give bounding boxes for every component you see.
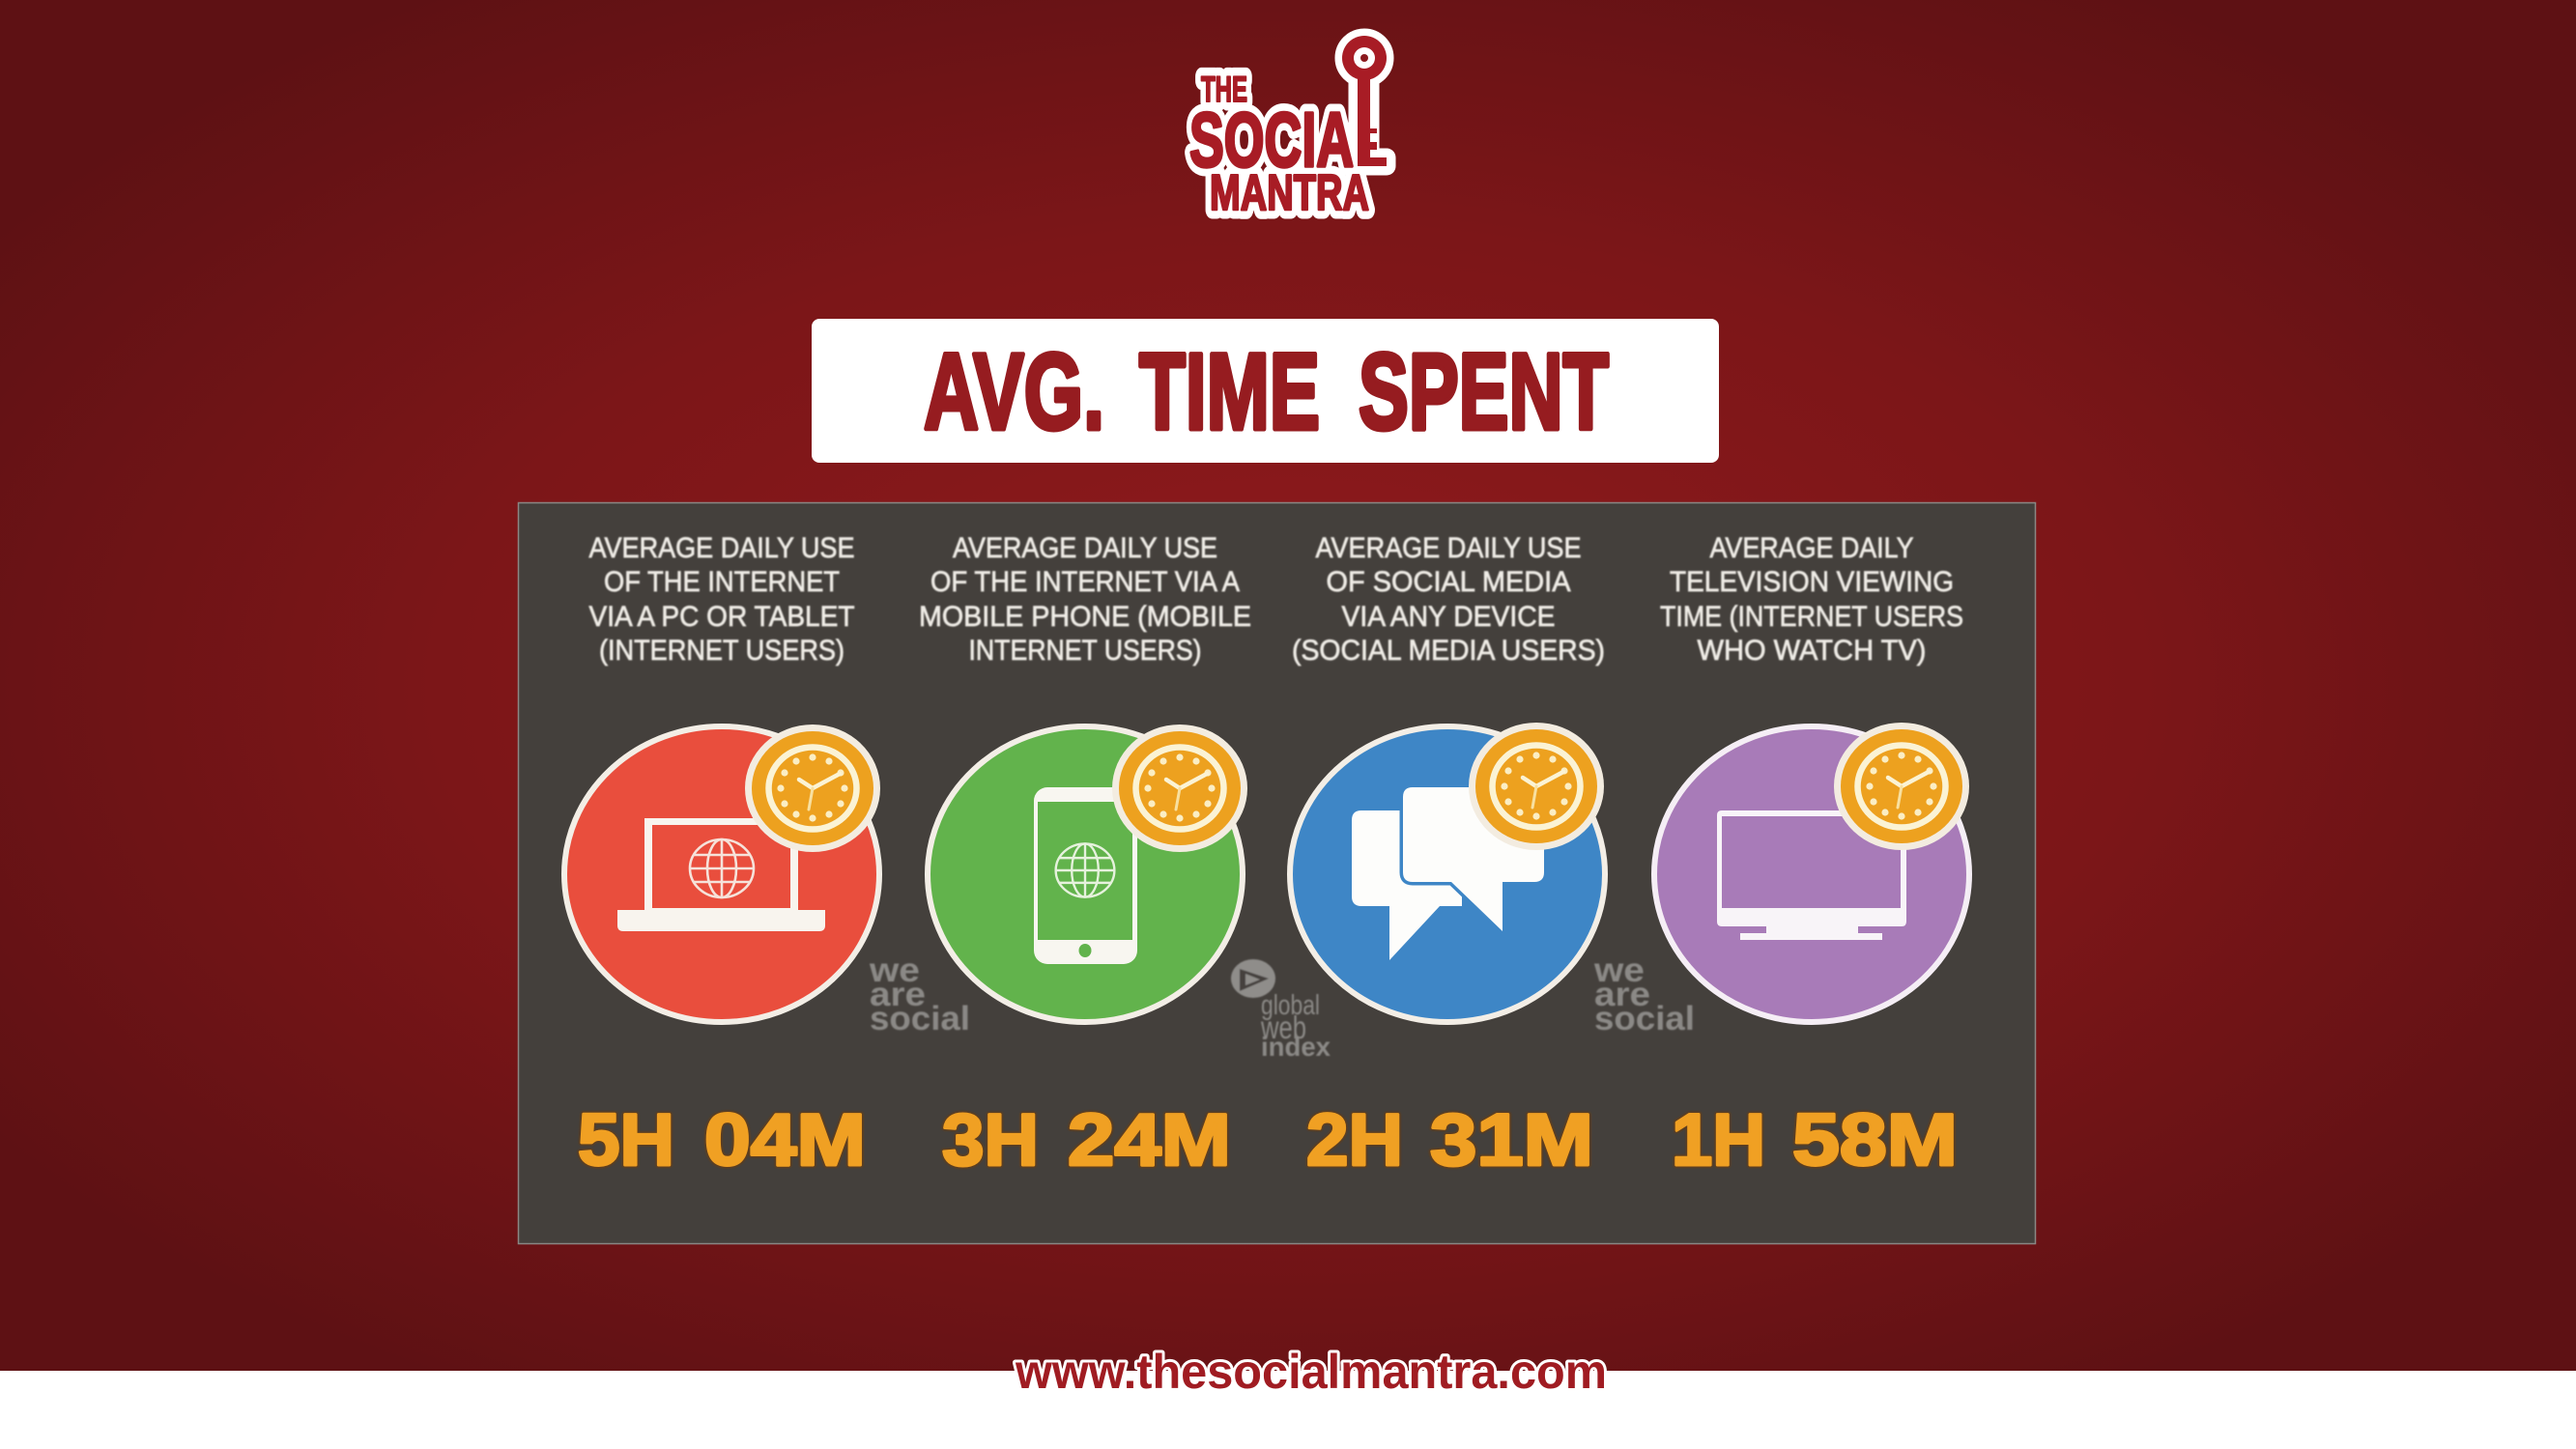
- logo white outline: THE: [1201, 70, 1247, 109]
- heading: PC or tablet: (INTERNET USERS): [599, 635, 844, 667]
- value: 1h 58m: [1672, 1099, 1958, 1181]
- we are social logo 2: are: [1594, 976, 1650, 1013]
- value: 5h 04m: 04M: [704, 1099, 866, 1181]
- title banner: [812, 319, 1719, 463]
- footer website url: www.thesocialmantra.com: [1015, 1345, 1607, 1399]
- we are social logo 1: [869, 952, 970, 1037]
- heading: mobile: OF THE INTERNET VIA A: [930, 566, 1240, 598]
- logo wordmark: SOCIA: [1189, 97, 1354, 183]
- logo wordmark: THE: [1201, 70, 1247, 109]
- heading: mobile: INTERNET USERS): [968, 635, 1202, 667]
- value: 5h 04m: 5H: [578, 1099, 674, 1181]
- heading: social media: AVERAGE DAILY USE: [1316, 532, 1581, 564]
- logo key: [1342, 36, 1387, 166]
- heading: mobile: [919, 532, 1251, 667]
- column 1: PC or tablet: [564, 532, 880, 1181]
- heading: PC or tablet: VIA A PC OR TABLET: [589, 601, 854, 633]
- value: 1h 58m: 58M: [1792, 1099, 1958, 1181]
- title text: SPENT: [1359, 331, 1609, 452]
- we are social logo 2: we: [1593, 952, 1645, 989]
- heading: social media: (SOCIAL MEDIA USERS): [1292, 635, 1605, 667]
- heading: television: AVERAGE DAILY: [1710, 532, 1913, 564]
- logo white outline: SOCIA: [1189, 97, 1354, 183]
- value: 1h 58m: 58M: [1792, 1099, 1958, 1181]
- we are social logo 2: [1593, 952, 1695, 1037]
- title text: TIME: [1139, 331, 1320, 452]
- heading: television: TELEVISION VIEWING: [1670, 566, 1954, 598]
- we are social logo 2: social: [1594, 1000, 1695, 1037]
- value: 2h 31m: 2H: [1306, 1099, 1403, 1181]
- value: 5h 04m: 5H: [578, 1099, 674, 1181]
- title text: [924, 331, 1609, 452]
- value: 1h 58m: 1H: [1672, 1099, 1765, 1181]
- heading: mobile: AVERAGE DAILY USE: [953, 532, 1217, 564]
- icon: phone in green circle: [928, 724, 1247, 1022]
- value: 3h 24m: [942, 1099, 1231, 1181]
- heading: PC or tablet: [589, 532, 854, 667]
- heading: television: TIME (INTERNET USERS: [1660, 601, 1963, 633]
- logo: The Social Mantra: [1189, 36, 1387, 221]
- logo white outline: MANTRA: [1210, 165, 1369, 221]
- global web index logo: global: [1261, 990, 1320, 1021]
- value: 3h 24m: 24M: [1068, 1099, 1231, 1181]
- value: 1h 58m: 1H: [1672, 1099, 1765, 1181]
- column 4: television: [1654, 532, 1969, 1181]
- value: 3h 24m: 3H: [942, 1099, 1039, 1181]
- value: 3h 24m: 24M: [1068, 1099, 1231, 1181]
- global web index logo: web: [1260, 1009, 1306, 1045]
- value: 2h 31m: 2H: [1306, 1099, 1403, 1181]
- heading: PC or tablet: OF THE INTERNET: [604, 566, 840, 598]
- value: 2h 31m: 31M: [1430, 1099, 1593, 1181]
- heading: social media: OF SOCIAL MEDIA: [1326, 566, 1571, 598]
- logo wordmark: MANTRA: [1210, 165, 1369, 221]
- we are social logo 1: social: [870, 1000, 970, 1037]
- global web index logo: index: [1261, 1032, 1331, 1062]
- icon: chat bubbles in blue circle: [1290, 723, 1605, 1022]
- heading: television: WHO WATCH TV): [1697, 635, 1927, 667]
- value: 2h 31m: 31M: [1430, 1099, 1593, 1181]
- we are social logo 1: we: [869, 952, 920, 989]
- title text: AVG.: [924, 331, 1104, 452]
- value: 5h 04m: 04M: [704, 1099, 866, 1181]
- column 2: mobile phone: [919, 532, 1251, 1181]
- heading: mobile: MOBILE PHONE (MOBILE: [919, 601, 1251, 633]
- heading: television: [1660, 532, 1963, 667]
- heading: social media: [1292, 532, 1605, 667]
- footer website url: www.thesocialmantra.com: [1015, 1345, 1607, 1399]
- we are social logo 1: are: [870, 976, 926, 1013]
- value: 3h 24m: 3H: [942, 1099, 1039, 1181]
- global web index logo: [1231, 959, 1331, 1062]
- icon: tv in purple circle: [1654, 723, 1969, 1022]
- icon: laptop in red circle: [564, 724, 880, 1022]
- value: 2h 31m: [1306, 1099, 1593, 1181]
- logo wordmark: [1189, 70, 1369, 221]
- logo white outline: [1189, 38, 1387, 221]
- panel: time spent infographic: [518, 502, 2035, 1244]
- value: 5h 04m: [578, 1099, 866, 1181]
- heading: PC or tablet: AVERAGE DAILY USE: [589, 532, 854, 564]
- column 3: social media: [1290, 532, 1605, 1181]
- heading: social media: VIA ANY DEVICE: [1341, 601, 1556, 633]
